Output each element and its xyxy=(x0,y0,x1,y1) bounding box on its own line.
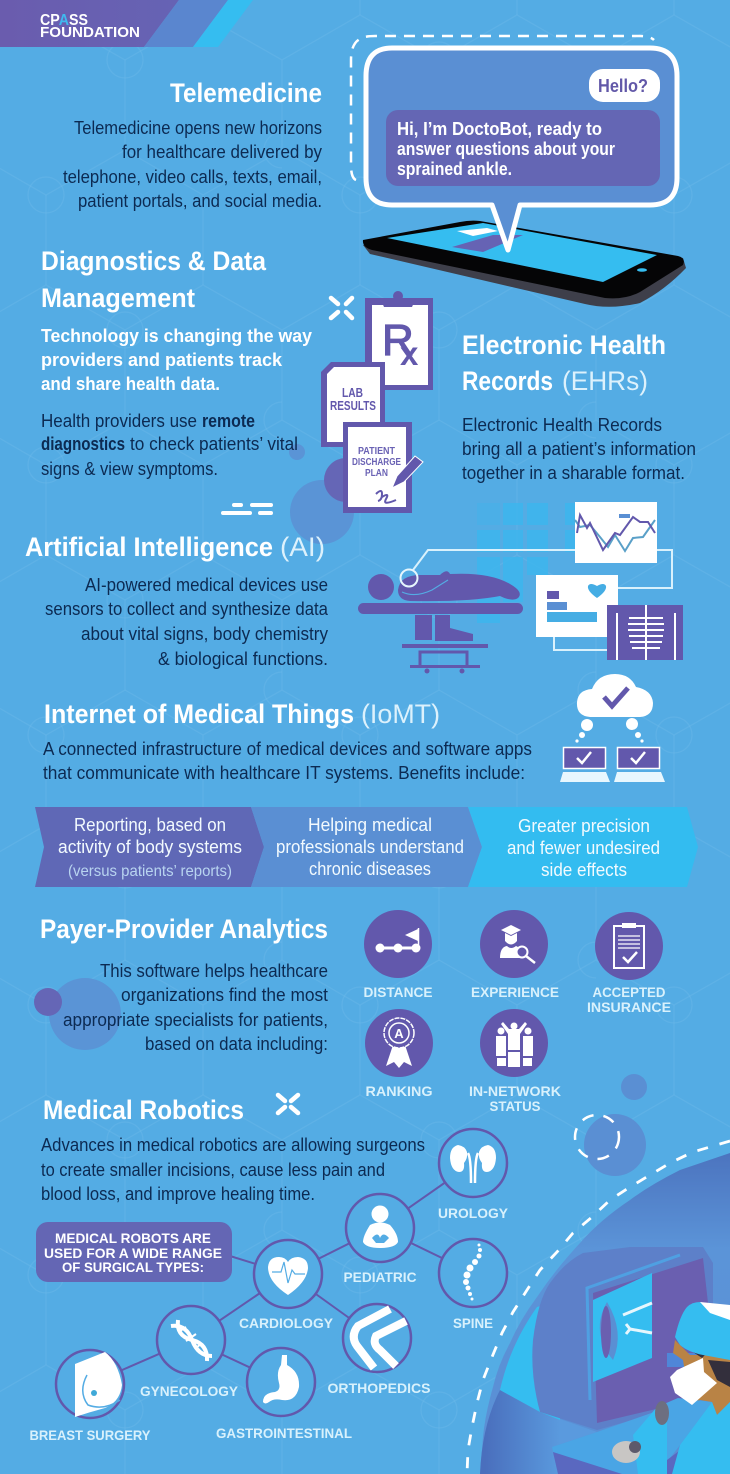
node: spine xyxy=(439,1239,507,1331)
heading: Diagnostics & Data Management xyxy=(41,246,267,313)
chat message: Hello xyxy=(589,69,660,102)
arrow: helping professionals: professionals understand xyxy=(276,837,464,857)
document: discharge plan: PLAN xyxy=(365,467,388,479)
text: AI description xyxy=(45,575,329,669)
text: analytics description xyxy=(63,961,328,1054)
heading: Electronic Health Records: Electronic Health xyxy=(462,330,666,360)
icon: experience xyxy=(480,910,548,978)
cyan light band xyxy=(500,1300,560,1420)
label: accepted insurance: INSURANCE xyxy=(587,999,671,1015)
node: pediatric: PEDIATRIC xyxy=(344,1269,416,1285)
text: remote diagnostics xyxy=(41,411,298,479)
node: gynecology: GYNECOLOGY xyxy=(140,1383,239,1399)
heading: Electronic Health Records: Records xyxy=(462,366,553,396)
label: experience: EXPERIENCE xyxy=(471,984,559,1000)
heading: Electronic Health Records xyxy=(462,330,666,396)
node: breast surgery xyxy=(30,1350,151,1443)
node: orthopedics xyxy=(328,1304,430,1396)
text: analytics description: This software helps healthcare xyxy=(100,961,328,981)
illustration: patient monitoring xyxy=(358,502,683,674)
icon: distance xyxy=(364,910,432,978)
lower-left shadow xyxy=(480,1390,597,1474)
chat message: DoctoBot: Hi, I’m DoctoBot, ready to xyxy=(397,119,602,139)
icon: cloud and laptops xyxy=(560,674,665,782)
dashed curve around surgeon scene xyxy=(467,1141,730,1474)
text: diagnostics lead: providers and patients track xyxy=(41,350,283,370)
icon: in-network status xyxy=(480,1009,548,1077)
text: robotics description: Advances in medical robotics are allowing surgeons xyxy=(41,1135,425,1155)
node: pediatric xyxy=(344,1194,416,1285)
text: telemedicine description: for healthcare delivered by xyxy=(122,142,322,162)
node: orthopedics: ORTHOPEDICS xyxy=(328,1380,430,1396)
text: EHR description: together in a sharable format. xyxy=(462,463,685,483)
text: remote diagnostics: Health providers use xyxy=(41,411,197,431)
console monitor xyxy=(532,1247,713,1430)
label: distance: DISTANCE xyxy=(364,984,432,1000)
arrow: reporting: Reporting, based on xyxy=(74,815,226,835)
node: spine: SPINE xyxy=(453,1315,493,1331)
node: urology xyxy=(438,1129,509,1221)
arrow: helping professionals xyxy=(251,807,482,887)
connector lines xyxy=(413,550,672,650)
dashed outline around chat bubble xyxy=(351,36,654,180)
callout: surgical types xyxy=(36,1222,232,1282)
chat message: Hello: Hello? xyxy=(598,76,648,96)
text: remote diagnostics: signs & view symptoms. xyxy=(41,459,218,479)
label: in-network status: STATUS xyxy=(490,1098,540,1114)
arrow: reporting: (versus patients’ reports) xyxy=(68,863,232,880)
text: robotics description: to create smaller incisions, cause less pain and xyxy=(41,1160,385,1180)
cloud xyxy=(575,674,653,743)
document: discharge plan: PATIENT xyxy=(358,445,395,457)
text: diagnostics lead: Technology is changing the way xyxy=(41,326,312,346)
surgeon xyxy=(612,1302,730,1474)
header banner with logo xyxy=(0,0,253,47)
patient on operating table xyxy=(358,571,523,674)
text: telemedicine description: patient portals, and social media. xyxy=(78,191,322,211)
node: gynecology xyxy=(140,1306,239,1399)
node: gastrointestinal: GASTROINTESTINAL xyxy=(216,1425,352,1441)
document: lab results: RESULTS xyxy=(330,398,376,413)
icon: ranking: A xyxy=(394,1026,404,1041)
text: remote diagnostics: to check patients’ vital xyxy=(130,434,298,454)
console desk xyxy=(552,1410,660,1474)
text: IoMT description: A connected infrastructure of medical devices and software apps xyxy=(43,739,532,759)
decorative circles: robotics xyxy=(575,1074,647,1176)
connector lines xyxy=(90,1163,473,1384)
heading: Payer-Provider Analytics: Payer-Provider Analytics xyxy=(40,914,328,944)
text: remote diagnostics: diagnostics xyxy=(41,434,125,454)
callout: surgical types: USED FOR A WIDE RANGE xyxy=(44,1245,222,1261)
arrow: greater precision: and fewer undesired xyxy=(507,838,660,858)
document: Rx clipboard: x xyxy=(400,335,419,372)
label: ranking: RANKING xyxy=(366,1083,433,1099)
document: Rx clipboard xyxy=(365,291,433,390)
node: cardiology xyxy=(239,1240,334,1331)
icon: sparkle cross xyxy=(278,1095,298,1113)
heading: Artificial Intelligence: Artificial Intelligence xyxy=(25,532,273,562)
heading: Internet of Medical Things: Internet of Medical Things xyxy=(44,699,354,729)
decorative circles: diagnostics xyxy=(289,444,368,544)
text: EHR description: bring all a patient’s information xyxy=(462,439,696,459)
chat bubble xyxy=(366,48,677,250)
records card xyxy=(536,575,618,637)
benefit arrows xyxy=(35,807,698,887)
text: diagnostics lead xyxy=(41,326,312,394)
text: EHR description: Electronic Health Records xyxy=(462,415,662,435)
illustration: surgeon at robotic console xyxy=(480,1153,730,1474)
text: AI description: & biological functions. xyxy=(158,649,328,669)
chat message: DoctoBot: sprained ankle. xyxy=(397,159,512,179)
chat message: DoctoBot: answer questions about your xyxy=(397,139,615,159)
text: AI description: AI-powered medical devices use xyxy=(85,575,328,595)
callout: surgical types: MEDICAL ROBOTS ARE xyxy=(55,1230,211,1246)
text: telemedicine description xyxy=(63,118,322,211)
arrow: reporting xyxy=(35,807,264,887)
x-ray card xyxy=(607,605,683,660)
decorative dashes xyxy=(221,503,273,515)
arrow: greater precision: Greater precision xyxy=(518,816,650,836)
text: IoMT description: that communicate with healthcare IT systems. Benefits include: xyxy=(43,763,525,783)
icon: ranking xyxy=(365,1009,433,1077)
icon: sparkle cross xyxy=(331,298,352,318)
heading: Medical Robotics: Medical Robotics xyxy=(43,1095,244,1125)
heading: Internet of Medical Things: (IoMT) xyxy=(361,699,440,729)
callout: surgical types: OF SURGICAL TYPES: xyxy=(62,1259,204,1275)
text: IoMT description xyxy=(43,739,532,783)
node: breast surgery: BREAST SURGERY xyxy=(30,1427,151,1443)
heading: Artificial Intelligence: (AI) xyxy=(280,532,325,562)
node: urology: UROLOGY xyxy=(438,1205,509,1221)
text: diagnostics lead: and share health data. xyxy=(41,374,220,394)
logo: CPASS Foundation: FOUNDATION xyxy=(40,24,140,41)
node: cardiology: CARDIOLOGY xyxy=(239,1315,334,1331)
heading: Electronic Health Records: (EHRs) xyxy=(562,366,648,396)
label: accepted insurance: ACCEPTED xyxy=(592,984,666,1000)
arrow: helping professionals: chronic diseases xyxy=(309,859,431,879)
logo: CPASS Foundation xyxy=(40,12,140,41)
document: Rx clipboard: R xyxy=(382,316,414,365)
chart card xyxy=(575,502,657,563)
icon: accepted insurance xyxy=(595,912,663,980)
chat message: DoctoBot xyxy=(386,110,660,186)
logo: CPASS Foundation: CPASS xyxy=(40,12,88,29)
arrow: greater precision: side effects xyxy=(541,860,627,880)
icon: smartphone xyxy=(363,221,686,307)
text: analytics description: organizations find the most xyxy=(121,985,328,1005)
text: telemedicine description: telephone, video calls, texts, email, xyxy=(63,167,322,187)
document: discharge plan xyxy=(343,422,423,513)
robot specialties network xyxy=(30,1129,509,1443)
icon: medical documents xyxy=(321,291,433,513)
text: EHR description xyxy=(462,415,696,483)
laptop left xyxy=(560,748,610,782)
laptop right xyxy=(614,748,665,782)
text: analytics description: based on data including: xyxy=(145,1034,328,1054)
label: in-network status: IN-NETWORK xyxy=(469,1083,561,1099)
arrow: greater precision xyxy=(468,807,698,887)
data grid backdrop xyxy=(477,503,575,623)
document: lab results xyxy=(321,362,385,447)
label: accepted insurance xyxy=(587,984,671,1015)
document: discharge plan: DISCHARGE xyxy=(352,456,401,468)
text: robotics description: blood loss, and improve healing time. xyxy=(41,1184,315,1204)
text: telemedicine description: Telemedicine opens new horizons xyxy=(74,118,322,138)
label: in-network status xyxy=(469,1083,561,1114)
text: AI description: about vital signs, body chemistry xyxy=(81,624,328,644)
arrow: helping professionals: Helping medical xyxy=(308,815,432,835)
text: analytics description: appropriate specialists for patients, xyxy=(63,1010,328,1030)
arrow: reporting: activity of body systems xyxy=(58,837,242,857)
decorative circles: analytics xyxy=(34,978,121,1050)
heading: Diagnostics & Data Management: Diagnostics & Data xyxy=(41,246,267,276)
heading: Diagnostics & Data Management: Management xyxy=(41,283,195,313)
document: lab results: LAB xyxy=(342,385,363,400)
text: AI description: sensors to collect and synthesize data xyxy=(45,599,329,619)
text: remote diagnostics: remote xyxy=(202,411,255,431)
text: robotics description xyxy=(41,1135,425,1204)
heading: Telemedicine: Telemedicine xyxy=(170,78,322,108)
node: gastrointestinal xyxy=(216,1348,352,1441)
background shape xyxy=(480,1153,730,1474)
